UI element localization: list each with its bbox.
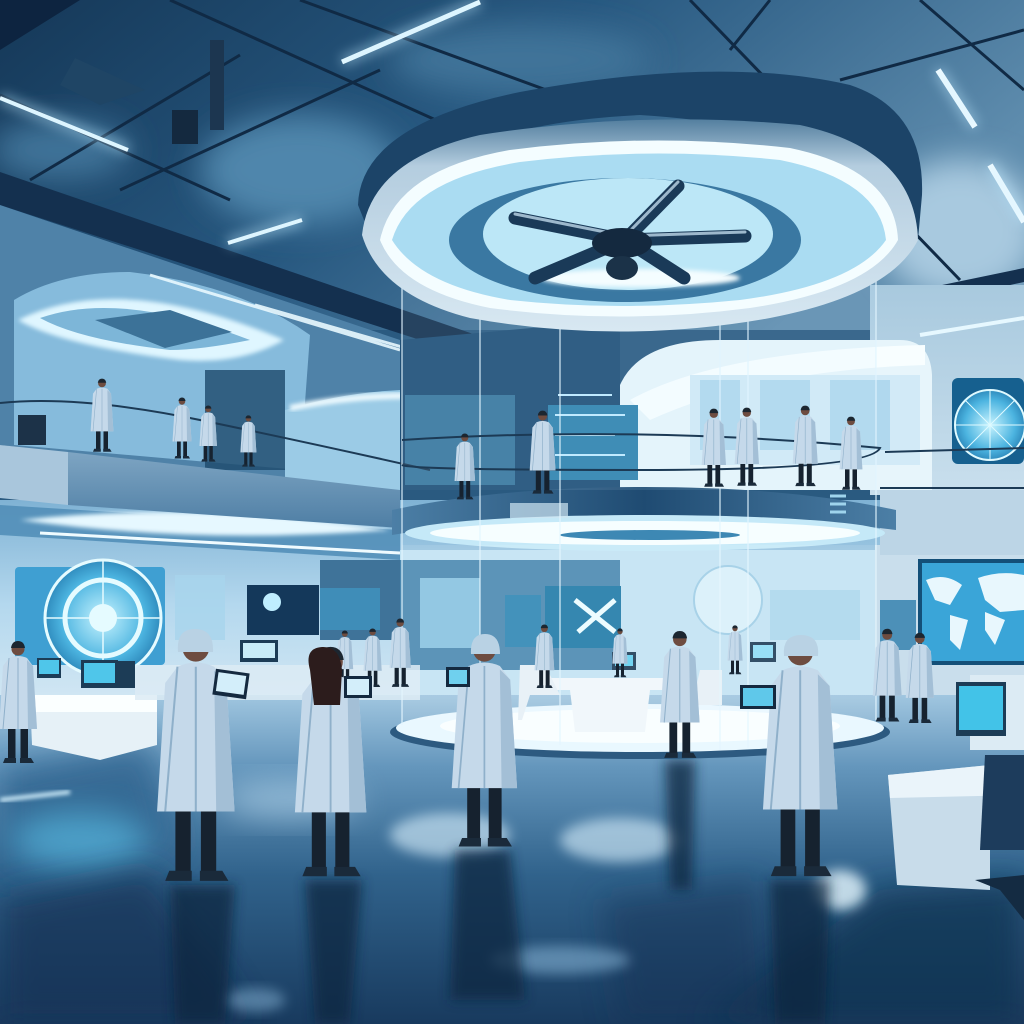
circular floor platform (390, 704, 890, 759)
lower level rooms (0, 500, 1024, 715)
foreground person 3 from behind with tablet (446, 634, 517, 847)
balcony people (91, 379, 862, 499)
floor (0, 695, 1024, 1024)
foreground person 4 with cap and tablet (740, 635, 837, 876)
central conference table and chairs (518, 642, 776, 732)
left desks and monitors (30, 640, 420, 760)
upper left wall and room (0, 205, 520, 490)
ceiling (0, 0, 1024, 372)
upper right wall and room (400, 285, 1024, 495)
data panel screens (175, 566, 916, 650)
cylinder platform (392, 487, 896, 551)
foreground person 1 with cap and tablet (157, 629, 250, 881)
ceiling light strips (0, 2, 1024, 243)
glass cylinder (402, 150, 880, 750)
screen: world map (918, 559, 1024, 665)
foreground person 2 with dark hair and tablet (295, 647, 372, 876)
screen: hologram globe left (15, 560, 165, 676)
ceiling fixture with ring light (358, 72, 922, 331)
balcony right (880, 448, 1024, 555)
drone fan fixture (515, 182, 745, 280)
floor reflections of people (170, 760, 830, 1024)
lower level people (0, 619, 934, 763)
right desk, monitors and chair (888, 675, 1024, 920)
balcony left (0, 401, 430, 528)
sphere hologram upper right (952, 378, 1024, 464)
